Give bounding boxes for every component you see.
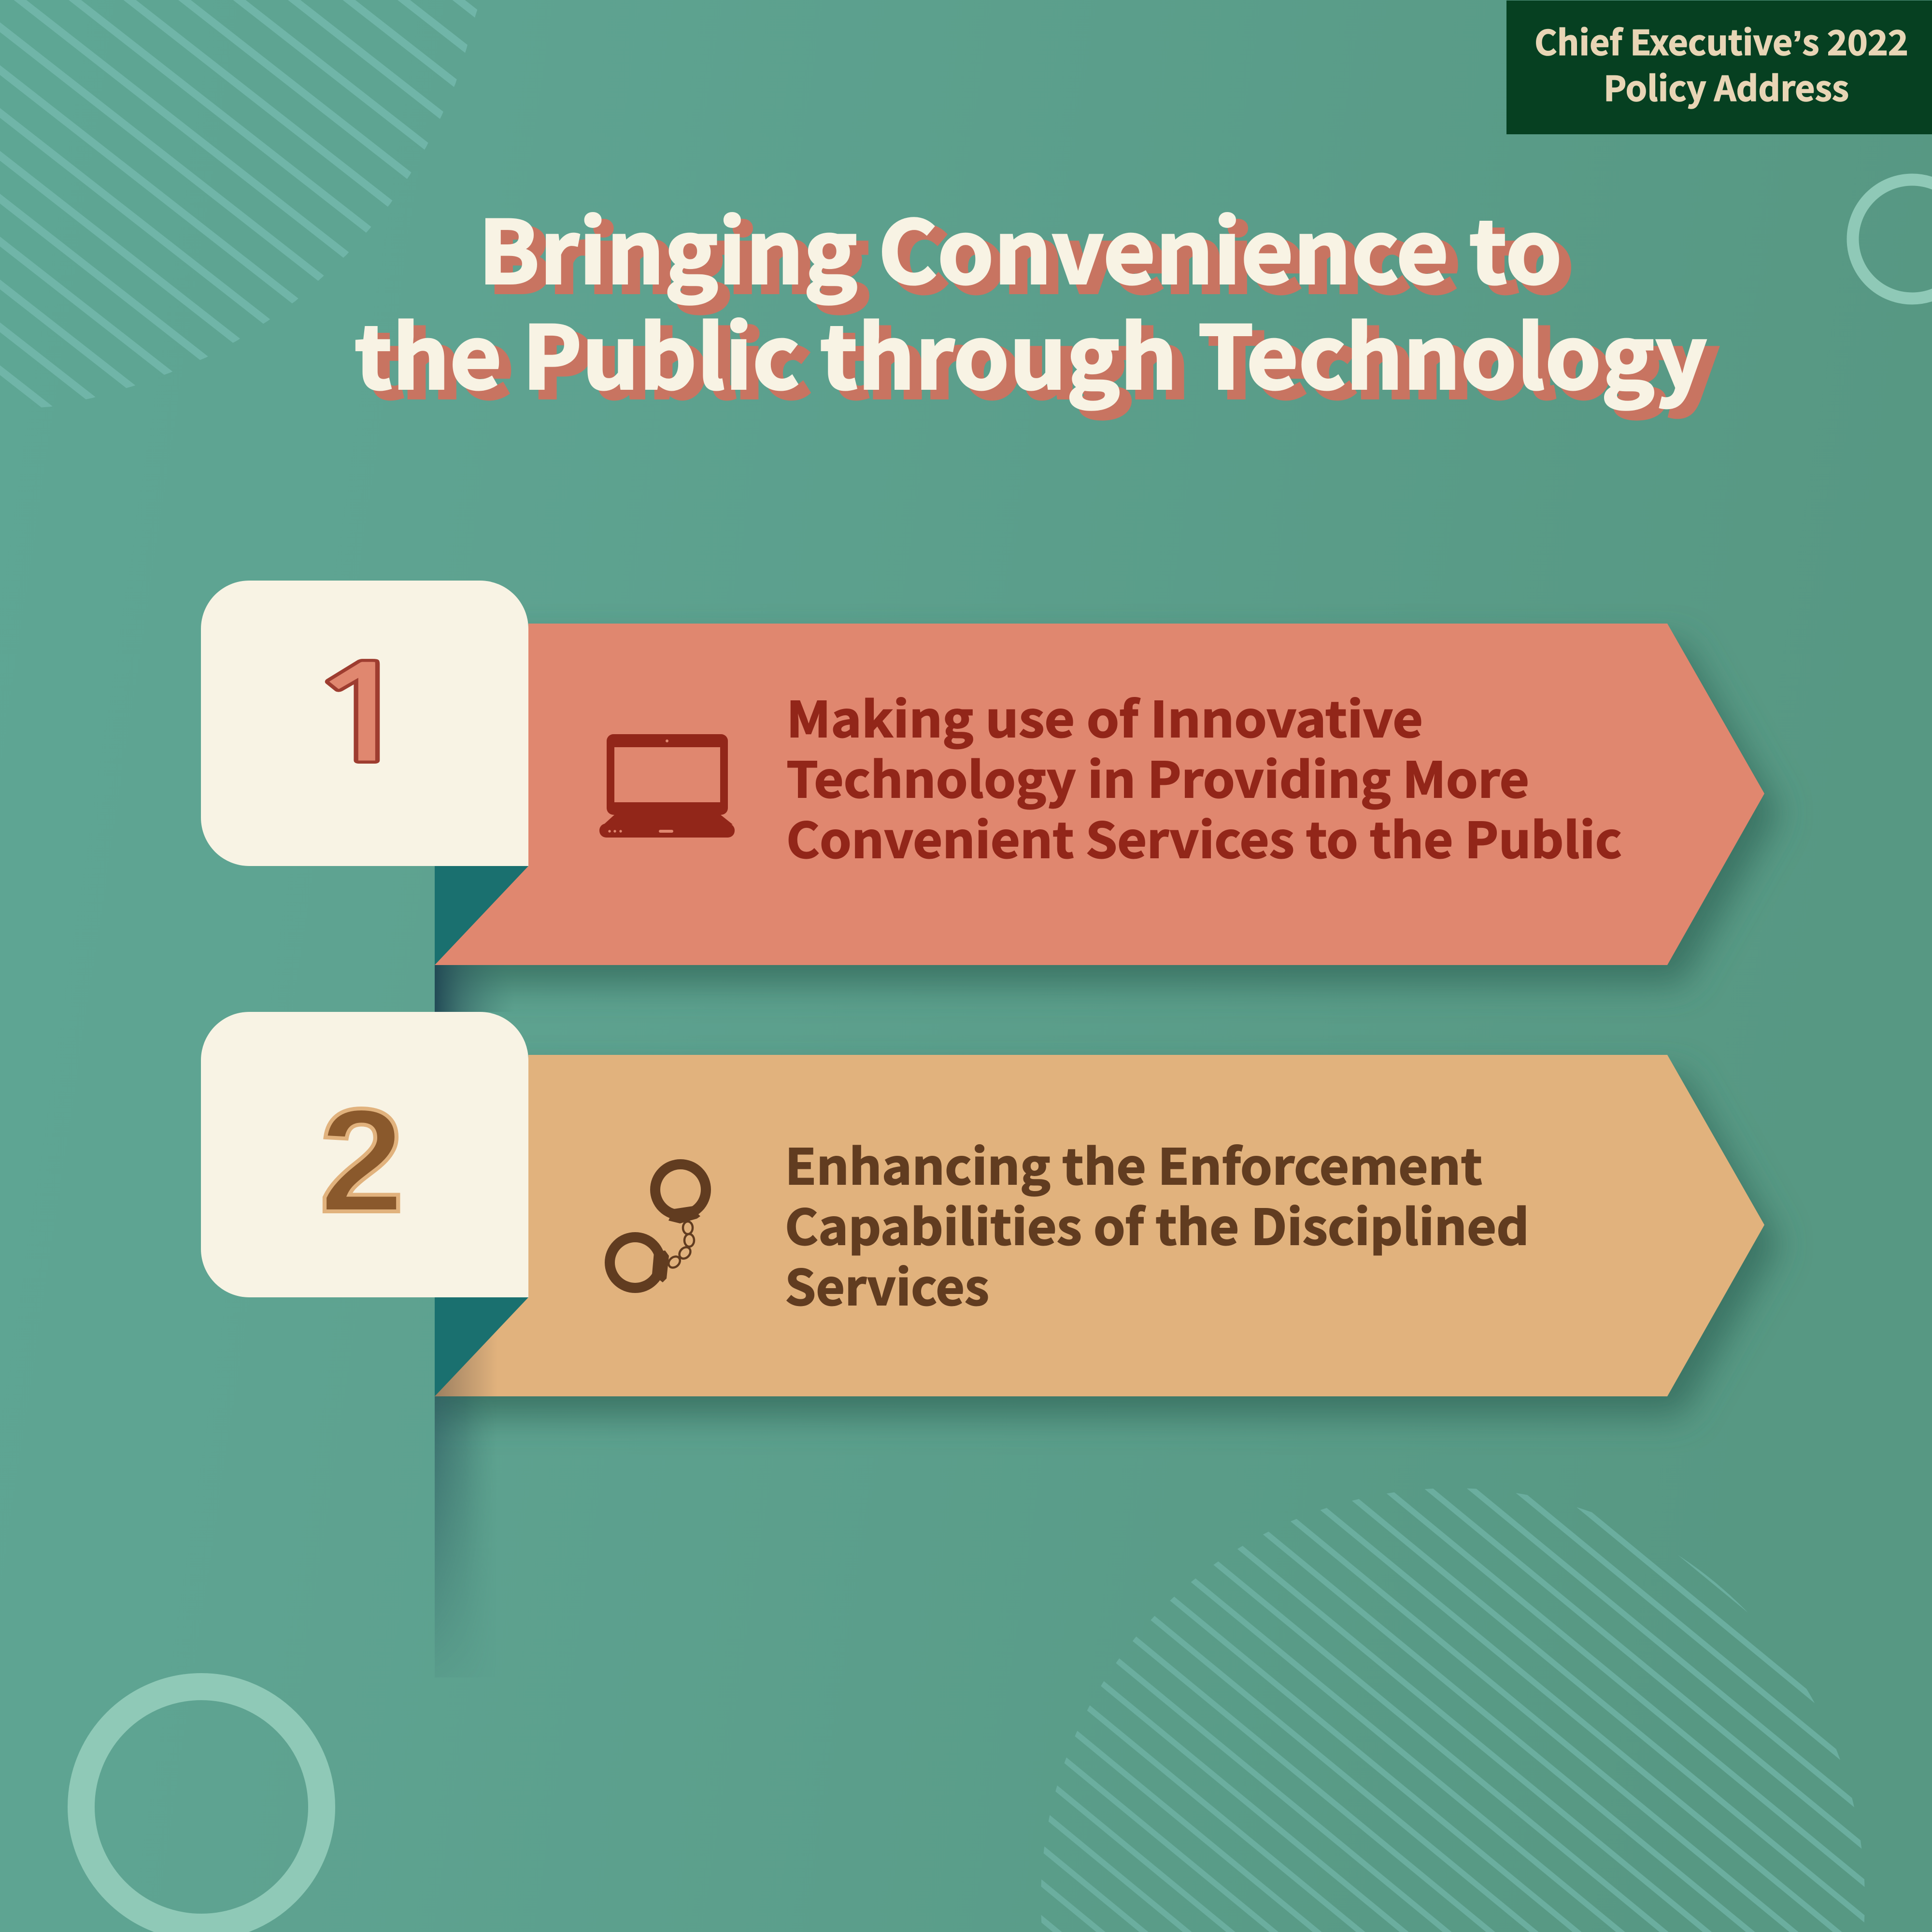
item 2 bbox=[201, 1012, 1764, 1396]
text 2 bbox=[785, 1128, 1529, 1320]
number 1: 1 bbox=[301, 649, 423, 782]
text 1: Making use of Innovative bbox=[786, 681, 1423, 752]
number card 2 bbox=[201, 1012, 528, 1297]
title: the Public through Technology bbox=[355, 288, 1707, 414]
fold triangle 1 bbox=[435, 866, 528, 965]
icon: laptop bbox=[599, 734, 735, 838]
icon: handcuffs bbox=[610, 1164, 706, 1288]
badge: Chief Executive's 2022 Policy Address bbox=[1506, 0, 1932, 134]
decorative ring top right bbox=[1853, 180, 1932, 298]
stripes bottom right bbox=[1041, 1489, 1864, 1932]
number card 1 bbox=[201, 581, 528, 866]
shadows under the arrows bbox=[425, 643, 1779, 1677]
title: Bringing Convenience to bbox=[478, 183, 1562, 309]
stripes top left bbox=[0, 0, 477, 408]
fold triangle 2 bbox=[435, 1297, 528, 1396]
text 1: Convenient Services to the Public bbox=[786, 802, 1622, 872]
text 2: Capabilities of the Disciplined bbox=[785, 1189, 1529, 1259]
text 2: Enhancing the Enforcement bbox=[785, 1128, 1482, 1199]
badge: Chief Executive's 2022 Policy Address: Policy Address bbox=[1604, 62, 1849, 111]
title: Bringing Convenience to bbox=[489, 191, 1573, 317]
badge: Chief Executive's 2022 Policy Address: Chief Executive’s 2022 bbox=[1534, 16, 1908, 65]
arrow banner 2 bbox=[435, 1055, 1764, 1396]
arrow banner 1 bbox=[435, 624, 1764, 965]
decorative ring bottom left bbox=[81, 1687, 322, 1927]
title bbox=[355, 183, 1718, 422]
number 2: 2 bbox=[319, 1078, 404, 1243]
title: the Public through Technology bbox=[365, 296, 1718, 422]
text 1 bbox=[786, 681, 1622, 872]
text 2: Services bbox=[785, 1249, 989, 1320]
text 1: Technology in Providing More bbox=[786, 741, 1529, 812]
item 1 bbox=[201, 581, 1764, 965]
